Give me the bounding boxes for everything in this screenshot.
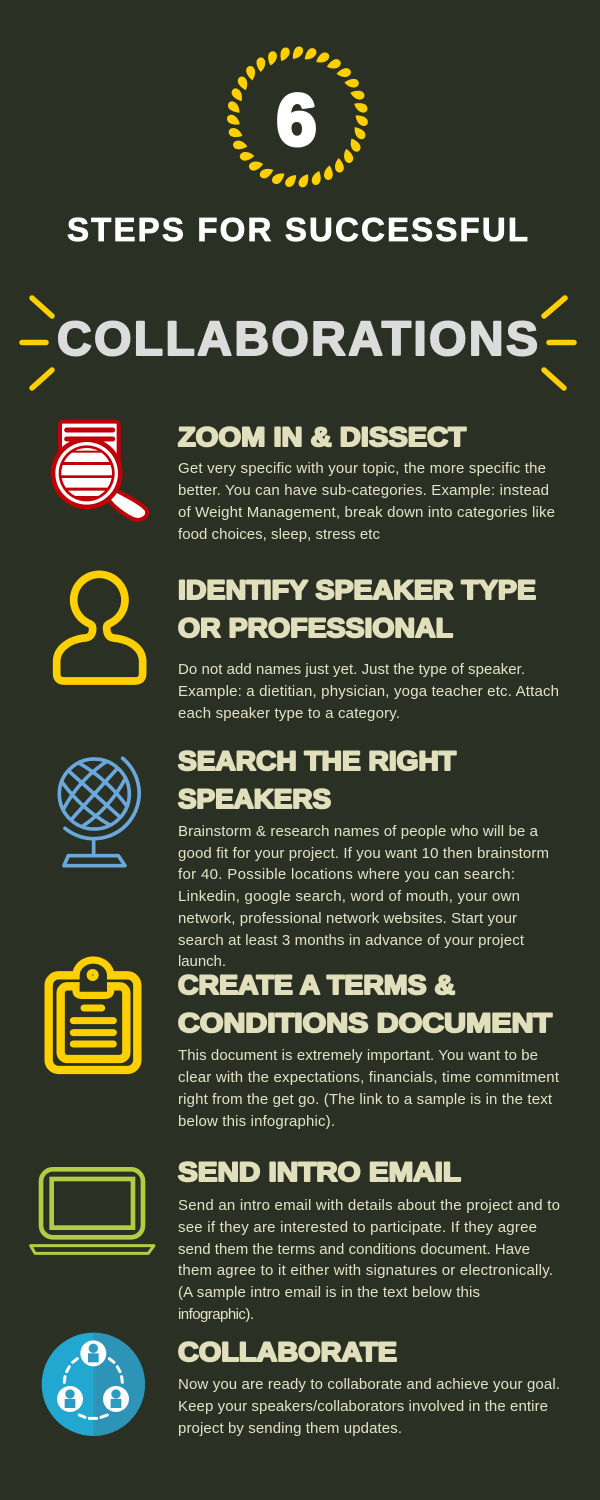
body text [178,661,559,722]
body text: launch. [178,953,226,970]
icon: connected people badge [42,1333,145,1436]
body text: This document is extremely important. You want to be [178,1047,538,1064]
body text: right from the get go. (The link to a sample is in the text [178,1091,553,1108]
badge: number six in droplet ring [227,46,368,188]
body text: better. You can have sub-categories. Example: instead [178,482,549,499]
number 6: 6 [276,81,317,161]
body text: food choices, sleep, stress etc [178,526,380,543]
body text: Keep your speakers/collaborators involved in the entire [178,1398,548,1415]
heading: ZOOM IN & DISSECT [178,422,467,452]
body text: search at least 3 months in advance of your project [178,932,525,949]
heading: CREATE A TERMS & [178,970,455,1000]
heading [178,746,457,814]
body text: Send an intro email with details about the project and to [178,1197,560,1214]
body text: Brainstorm & research names of people who will be a [178,823,539,840]
body text: clear with the expectations, financials, time commitment [178,1069,560,1086]
panel: step 3 search the right speakers [45,745,549,970]
body text: infographic). [178,1306,254,1323]
heading: SPEAKERS [178,784,331,814]
body text: each speaker type to a category. [178,705,400,722]
body text: Now you are ready to collaborate and achieve your goal. [178,1376,560,1393]
panel: step 5 send intro email [31,1157,560,1323]
panel: step 4 create terms and conditions document [49,960,560,1130]
collaborations word: COLLABORATIONS [57,313,538,366]
panel: step 1 zoom in and dissect [51,422,555,543]
body text [178,1047,560,1130]
icon: magnifier over document [51,422,147,520]
heading [178,575,536,643]
body text [178,460,555,543]
heading: IDENTIFY SPEAKER TYPE [178,575,536,605]
body text: Do not add names just yet. Just the type of speaker. [178,661,525,678]
sunburst strokes [22,298,574,388]
panel: step 6 collaborate [42,1333,560,1437]
body text: send them the terms and conditions document. Have [178,1241,530,1258]
body text [178,1376,560,1437]
droplet ring [227,46,368,188]
body text: of Weight Management, break down into categories like [178,504,555,521]
body text: Get very specific with your topic, the more specific the [178,460,546,477]
body text: them agree to it either with signatures or electronically. [178,1262,553,1279]
heading: CONDITIONS DOCUMENT [178,1008,553,1038]
heading [178,970,553,1038]
icon: laptop [31,1169,154,1253]
title line: steps for successful: STEPS FOR SUCCESSFUL [67,211,528,248]
body text: Linkedin, google search, word of mouth, your own [178,888,520,905]
body text: for 40. Possible locations where you can search: [178,866,515,883]
body text: see if they are interested to participate. If they agree [178,1219,537,1236]
heading: SEND INTRO EMAIL [178,1157,461,1187]
heading: SEARCH THE RIGHT [178,746,457,776]
icon: clipboard [49,960,137,1070]
body text: (A sample intro email is in the text below this [178,1284,480,1301]
body text: project by sending them updates. [178,1420,402,1437]
heading: COLLABORATE [178,1337,397,1367]
body text [178,823,549,970]
body text: good fit for your project. If you want 10 then brainstorm [178,845,549,862]
icon: globe [45,745,144,866]
body text [178,1197,560,1323]
body text: network, professional network websites. Start your [178,910,517,927]
heading: OR PROFESSIONAL [178,613,453,643]
body text: below this infographic). [178,1113,335,1130]
panel: step 2 identify speaker type [57,574,559,722]
title line: collaborations with sunburst [22,298,574,388]
icon: person outline [57,574,143,681]
body text: Example: a dietitian, physician, yoga teacher etc. Attach [178,683,559,700]
